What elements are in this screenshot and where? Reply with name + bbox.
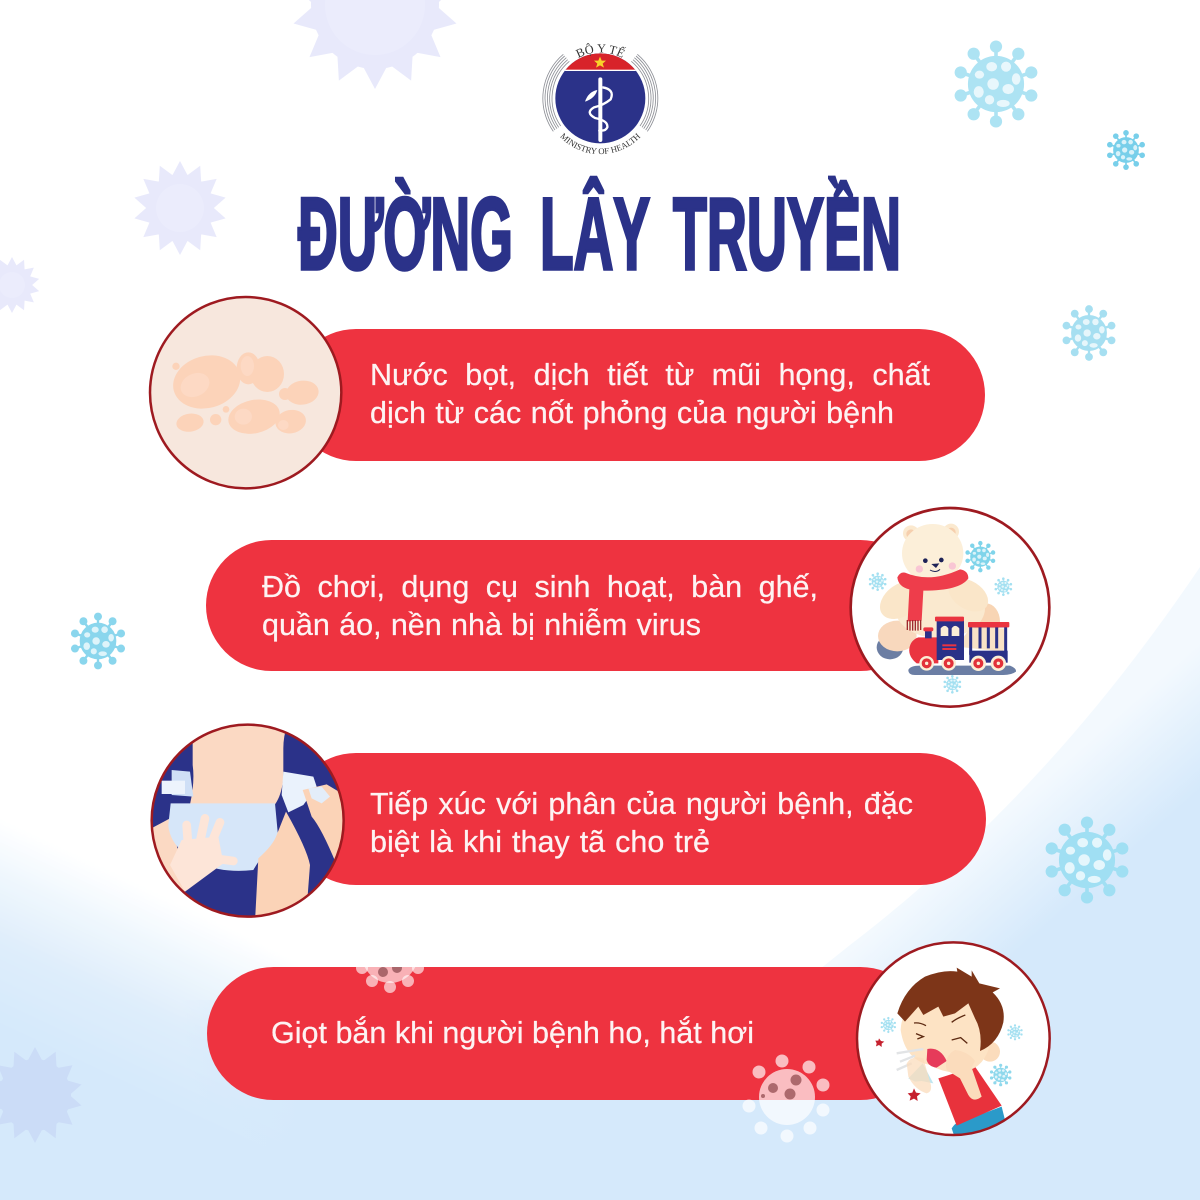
text: saliva and secretions: dịch từ các nốt phỏng của người bệnh — [370, 396, 894, 430]
text: contact with faeces: biệt là khi thay tã cho trẻ — [370, 825, 710, 859]
text: respiratory droplets: Giọt bắn khi người bệnh ho, hắt hơi — [271, 1016, 754, 1050]
icon: skin blisters — [150, 297, 341, 488]
panel: saliva and secretions — [148, 296, 985, 490]
translucent white viruses over pill — [356, 967, 830, 1142]
text: contaminated objects — [262, 570, 818, 642]
icon: changing a diaper — [148, 722, 350, 922]
logo: Ministry of Health emblem: MINISTRY OF HEALTH — [560, 132, 640, 154]
red pill — [207, 967, 927, 1100]
text: contaminated objects: Đồ chơi, dụng cụ sinh hoạt, bàn ghế, — [262, 570, 818, 604]
red pill — [206, 540, 926, 671]
icon: coughing boy — [857, 942, 1050, 1138]
panel: respiratory droplets — [207, 941, 1051, 1136]
panel: contaminated objects — [206, 506, 1051, 708]
title: LÂY — [540, 177, 650, 291]
panel: contact with faeces — [150, 723, 986, 918]
text: contact with faeces — [370, 787, 913, 859]
logo: Ministry of Health emblem: BỘ Y TẾ — [575, 43, 626, 58]
red pill — [290, 329, 985, 461]
red pill — [290, 753, 986, 885]
text: saliva and secretions: Nước bọt, dịch tiết từ mũi họng, chất — [370, 358, 930, 392]
icon: teddy bear and toy train — [851, 508, 1049, 707]
text: saliva and secretions — [370, 358, 930, 430]
text: contaminated objects: quần áo, nền nhà bị nhiễm virus — [262, 608, 701, 642]
logo: Ministry of Health emblem — [542, 43, 658, 154]
text: contact with faeces: Tiếp xúc với phân của người bệnh, đặc — [370, 787, 913, 821]
title: ĐƯỜNG — [298, 177, 513, 291]
